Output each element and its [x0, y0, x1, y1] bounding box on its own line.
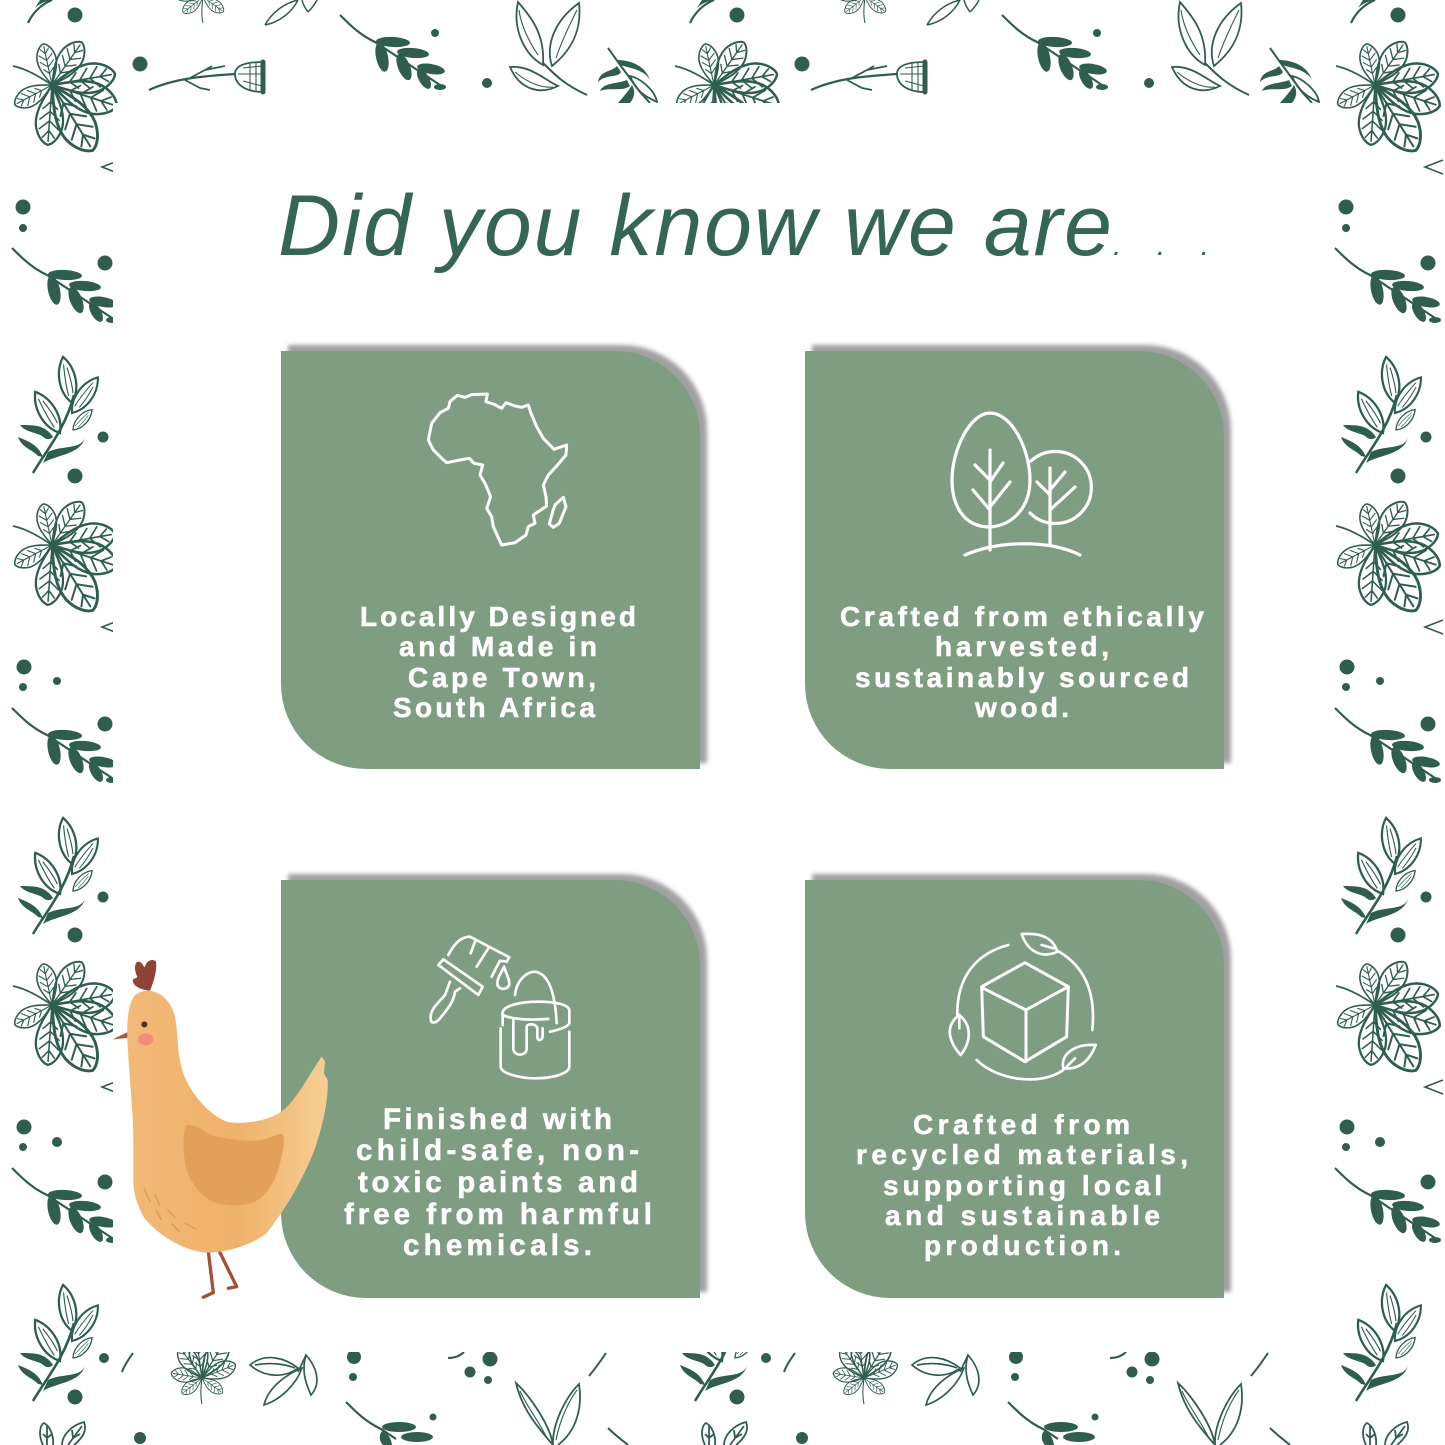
text: recycled materials: and sustainable: [885, 1200, 1160, 1231]
text: locally designed: and Made in: [399, 631, 597, 662]
text: recycled materials: recycled materials,: [856, 1139, 1188, 1170]
panel: locally designed: [281, 345, 707, 769]
hen body: [127, 991, 328, 1253]
text: recycled materials: supporting local: [883, 1170, 1162, 1201]
text: ethically harvested wood: [840, 601, 1204, 723]
text: child-safe paints: [344, 1103, 652, 1262]
text: child-safe paints: free from harmful: [344, 1198, 652, 1231]
text: ethically harvested wood: Crafted from ethically: [840, 601, 1204, 632]
text: child-safe paints: chemicals.: [403, 1229, 592, 1262]
text: locally designed: Locally Designed: [360, 601, 636, 632]
white centre panel: [113, 103, 1323, 1352]
hen wing: [184, 1125, 284, 1205]
title: Did you know we are: [278, 178, 1112, 274]
text: recycled materials: [856, 1109, 1188, 1261]
hen legs: [203, 1252, 237, 1297]
illustration: orange hen: [113, 960, 328, 1297]
text: recycled materials: Crafted from: [913, 1109, 1130, 1140]
text: ethically harvested wood: sustainably sourced: [855, 662, 1189, 693]
panel: child-safe paints: [281, 874, 707, 1298]
hen cheek: [138, 1033, 153, 1045]
text: recycled materials: production.: [924, 1230, 1121, 1261]
text: child-safe paints: Finished with: [383, 1103, 612, 1136]
hen beak: [113, 1029, 133, 1039]
title: . . .: [1113, 229, 1209, 262]
icon: trees: [952, 413, 1091, 555]
hen comb: [133, 960, 156, 991]
icon: Africa outline: [428, 394, 567, 545]
hen feather marks: [144, 1188, 196, 1232]
icon: recycling cube with leaves: [950, 934, 1096, 1079]
hen eye: [141, 1021, 147, 1027]
text: child-safe paints: child-safe, non-: [356, 1134, 639, 1167]
text: locally designed: Cape Town,: [408, 662, 596, 693]
text: child-safe paints: toxic paints and: [358, 1166, 638, 1199]
text: locally designed: [360, 601, 636, 723]
text: ethically harvested wood: wood.: [974, 692, 1069, 723]
text: ethically harvested wood: harvested,: [935, 631, 1109, 662]
text: locally designed: South Africa: [393, 692, 595, 723]
panel: recycled materials: [805, 874, 1231, 1298]
panel: ethically harvested wood: [805, 345, 1231, 769]
icon: paint brush and bucket: [431, 937, 569, 1078]
